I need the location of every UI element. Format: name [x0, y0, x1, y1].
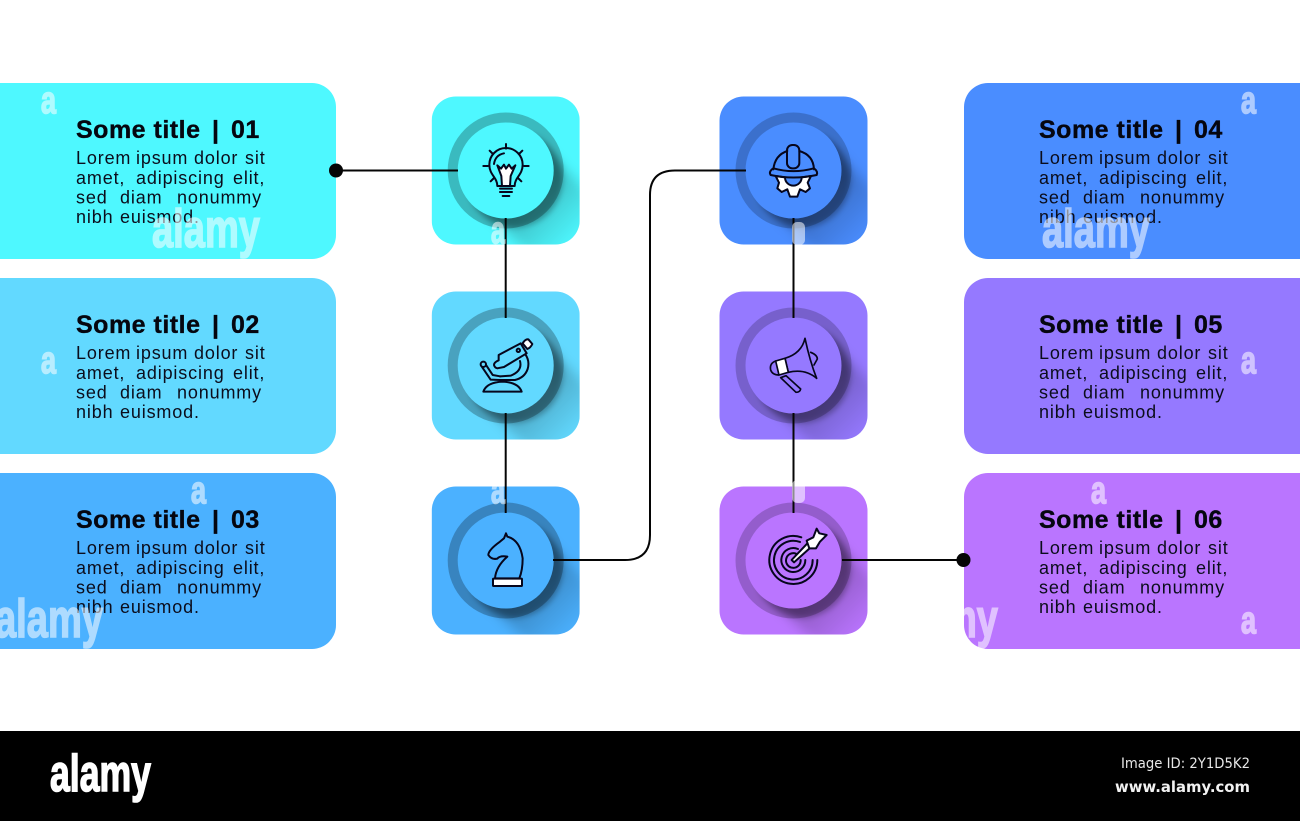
- card 01 text: dolor: [194, 148, 238, 168]
- card 04 text: nibh: [1039, 207, 1076, 227]
- card 04 text: dolor: [1157, 148, 1201, 168]
- card 04 title: 04: [1194, 116, 1223, 144]
- tile 04: [720, 96, 868, 244]
- card 05 text: nonummy: [1140, 382, 1225, 402]
- watermarks: a: [491, 470, 506, 512]
- card 06 text: nonummy: [1140, 578, 1225, 598]
- card 01 text: adipiscing: [136, 168, 225, 188]
- icon: megaphone: [770, 338, 817, 392]
- card 04 text: adipiscing: [1099, 168, 1188, 188]
- card 04 text: sed: [1039, 188, 1071, 208]
- watermarks: a: [1241, 80, 1257, 122]
- card 02 text: elit,: [233, 363, 265, 383]
- card 01 text: nonummy: [177, 188, 262, 208]
- watermarks: [0, 80, 1257, 649]
- card 02 text: amet,: [76, 363, 125, 383]
- watermarks: a: [41, 340, 57, 382]
- card 04 text: elit,: [1196, 168, 1228, 188]
- card 02 text: adipiscing: [136, 363, 225, 383]
- card 05 title: 05: [1194, 311, 1223, 339]
- card 03 title: Some title: [76, 506, 200, 534]
- watermarks: a: [41, 80, 57, 122]
- card 03 text: nibh: [76, 597, 113, 617]
- connector line: [329, 164, 970, 567]
- card 03 title: 03: [231, 506, 260, 534]
- website: www.alamy.com: [1115, 778, 1250, 796]
- tile 06: [720, 486, 868, 634]
- card 04 title: |: [1175, 116, 1182, 144]
- card 03 text: ipsum: [136, 538, 188, 558]
- card 03 text: dolor: [194, 538, 238, 558]
- card 05 text: dolor: [1157, 343, 1201, 363]
- watermarks: a: [191, 470, 207, 512]
- watermarks: a: [1091, 470, 1107, 512]
- card 05 text: amet,: [1039, 363, 1088, 383]
- card 02 text: euismod.: [120, 402, 200, 422]
- watermarks: alamy: [890, 589, 998, 649]
- card 01 title: Some title: [76, 116, 200, 144]
- card 01 text: euismod.: [120, 207, 200, 227]
- card 02 text: dolor: [194, 343, 238, 363]
- card 03 title: |: [212, 506, 220, 534]
- card 05: [964, 278, 1300, 454]
- card 06: [964, 473, 1300, 649]
- icon: microscope: [481, 339, 532, 392]
- card 06 title: 06: [1194, 506, 1223, 534]
- card 01 text: sed: [76, 188, 108, 208]
- card 03 text: diam: [120, 578, 162, 598]
- card 05 text: elit,: [1196, 363, 1228, 383]
- card 06 text: euismod.: [1083, 597, 1163, 617]
- card 06 text: amet,: [1039, 558, 1088, 578]
- card 01 text: sit: [245, 148, 266, 168]
- card 06 title: Some title: [1039, 506, 1163, 534]
- card 03 text: adipiscing: [136, 558, 225, 578]
- card 04: [964, 83, 1300, 259]
- card 01 text: ipsum: [136, 148, 188, 168]
- card 05 text: diam: [1083, 382, 1125, 402]
- card 05 text: [1039, 343, 1229, 422]
- icon: target with arrow: [769, 529, 827, 584]
- card 02 text: diam: [120, 382, 162, 402]
- card 02 text: sed: [76, 382, 108, 402]
- card 05 title: |: [1175, 311, 1182, 339]
- card 01 text: Lorem: [76, 148, 131, 168]
- card 04 text: [1039, 148, 1229, 227]
- tile 03: [432, 486, 580, 634]
- card 06 text: Lorem: [1039, 538, 1094, 558]
- card 02 text: nonummy: [177, 382, 262, 402]
- card 02 title: |: [212, 311, 220, 339]
- card 06 text: nibh: [1039, 597, 1076, 617]
- card 06 text: diam: [1083, 578, 1125, 598]
- watermarks: a: [1241, 340, 1257, 382]
- watermarks: alamy: [1042, 199, 1150, 259]
- card 04 text: diam: [1083, 188, 1125, 208]
- card 03 text: nonummy: [177, 578, 262, 598]
- icon: light bulb: [483, 144, 529, 196]
- card 02 text: sit: [245, 343, 266, 363]
- card 05 text: adipiscing: [1099, 363, 1188, 383]
- card 01 title: |: [212, 116, 220, 144]
- card 04 text: euismod.: [1083, 207, 1163, 227]
- footer logo: alamy: [50, 745, 151, 803]
- card 06 text: ipsum: [1099, 538, 1151, 558]
- card 04 text: nonummy: [1140, 188, 1225, 208]
- card 05 title: Some title: [1039, 311, 1163, 339]
- tile 01: [432, 96, 580, 244]
- card 02 text: nibh: [76, 402, 113, 422]
- card 02 text: ipsum: [136, 343, 188, 363]
- card 03 text: amet,: [76, 558, 125, 578]
- card 02 title: Some title: [76, 311, 200, 339]
- card 06 title: |: [1175, 506, 1182, 534]
- watermarks: a: [491, 210, 506, 252]
- icon: helmet with gear: [770, 145, 817, 197]
- card 03 text: [76, 538, 266, 617]
- tile 05: [720, 292, 868, 440]
- card 04 text: amet,: [1039, 168, 1088, 188]
- card 01 text: [76, 148, 266, 227]
- card 04 text: sit: [1208, 148, 1229, 168]
- card 02 title: 02: [231, 311, 260, 339]
- card 01: [0, 83, 336, 259]
- card 03 text: Lorem: [76, 538, 131, 558]
- card 06 text: [1039, 538, 1229, 617]
- card 06 text: sit: [1208, 538, 1229, 558]
- watermarks: alamy: [152, 199, 260, 259]
- card 01 title: 01: [231, 116, 260, 144]
- card 01 text: amet,: [76, 168, 125, 188]
- image id: Image ID: 2Y1D5K2: [1121, 756, 1250, 772]
- card 01 text: diam: [120, 188, 162, 208]
- card 06 text: elit,: [1196, 558, 1228, 578]
- card 05 text: nibh: [1039, 402, 1076, 422]
- card 04 text: ipsum: [1099, 148, 1151, 168]
- card 03 text: sed: [76, 578, 108, 598]
- card 01 text: nibh: [76, 207, 113, 227]
- watermarks: a: [1241, 600, 1257, 642]
- footer bar: [0, 731, 1300, 821]
- card 06 text: dolor: [1157, 538, 1201, 558]
- card 05 text: ipsum: [1099, 343, 1151, 363]
- tile 02: [432, 292, 580, 440]
- card 06 text: adipiscing: [1099, 558, 1188, 578]
- card 02 text: Lorem: [76, 343, 131, 363]
- card 02 text: [76, 343, 266, 422]
- card 04 text: Lorem: [1039, 148, 1094, 168]
- card 02: [0, 278, 336, 454]
- card 03: [0, 473, 336, 649]
- card 05 text: sit: [1208, 343, 1229, 363]
- card 03 text: sit: [245, 538, 266, 558]
- card 01 text: elit,: [233, 168, 265, 188]
- card 05 text: Lorem: [1039, 343, 1094, 363]
- card 03 text: euismod.: [120, 597, 200, 617]
- card 06 text: sed: [1039, 578, 1071, 598]
- icon: chess knight: [488, 533, 523, 586]
- card 03 text: elit,: [233, 558, 265, 578]
- card 04 title: Some title: [1039, 116, 1163, 144]
- card 05 text: sed: [1039, 382, 1071, 402]
- card 05 text: euismod.: [1083, 402, 1163, 422]
